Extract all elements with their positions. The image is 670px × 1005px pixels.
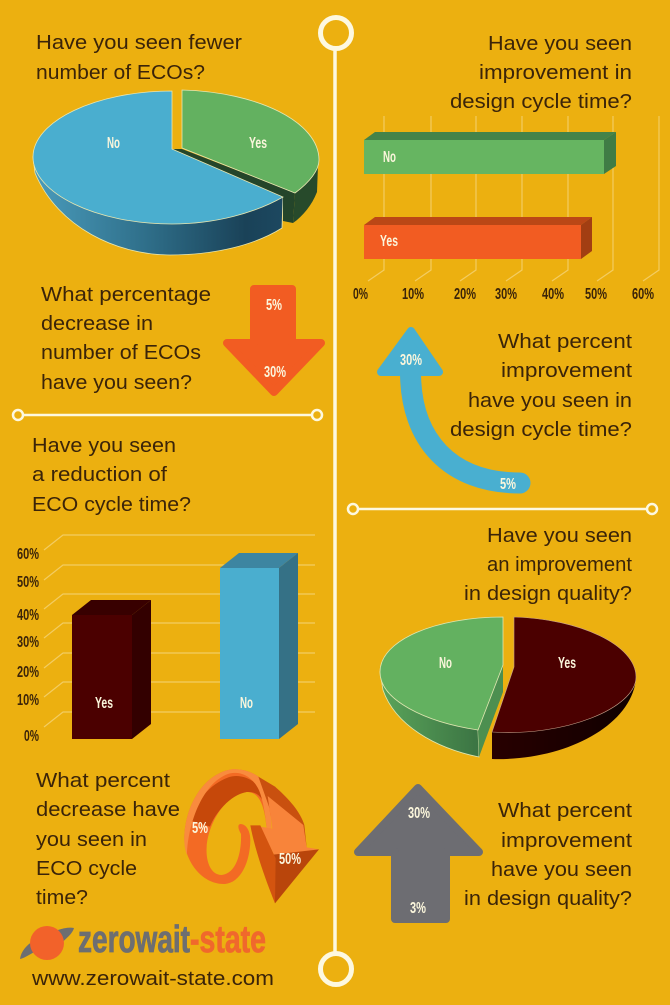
question: percent improvement in design quality xyxy=(464,800,632,910)
logo: zerowait-state xyxy=(20,919,266,961)
icon: blue curved arrow xyxy=(381,331,520,493)
pie chart: design quality: Yes xyxy=(558,655,576,672)
question: percent decrease in ECO cycle time: decrease have xyxy=(36,799,180,821)
heading: ECO cycle time: Have you seen xyxy=(32,435,176,457)
question: percent improvement in design quality: improvement xyxy=(501,830,632,852)
question: percent improvement in cycle time: have you seen in xyxy=(468,390,632,412)
heading: design cycle time: improvement in xyxy=(479,62,632,84)
bar chart: ECO cycle time: 20% xyxy=(17,664,39,681)
heading: design quality: an improvement xyxy=(487,554,632,576)
heading: ECO cycle time: a reduction of xyxy=(32,464,167,486)
question: percent improvement in design quality: What percent xyxy=(498,800,632,822)
icon: orange curly arrow xyxy=(184,769,319,903)
pie chart: fewer ECOs: Yes xyxy=(249,135,267,152)
bar chart: ECO cycle time: 0% xyxy=(24,728,39,745)
pie chart: design quality xyxy=(380,617,636,759)
question: percentage decrease: decrease in xyxy=(41,313,153,335)
bar chart: ECO cycle time: 60% xyxy=(17,546,39,563)
bar chart: ECO cycle time: 40% xyxy=(17,607,39,624)
question: percent decrease in ECO cycle time: ECO cycle xyxy=(36,858,137,880)
bar chart: design cycle time xyxy=(353,116,659,303)
bar chart: design cycle time: 0% xyxy=(353,286,368,303)
bar chart: design cycle time: No xyxy=(383,149,396,166)
bar chart: design cycle time: Yes xyxy=(380,233,398,250)
icon: grey up arrow xyxy=(358,788,479,919)
website url: www.zerowait-state.com xyxy=(31,968,274,990)
question: percent improvement in cycle time: improvement xyxy=(501,360,632,382)
pie chart: fewer ECOs xyxy=(33,90,319,255)
question: percent decrease in ECO cycle time xyxy=(36,770,180,909)
logo: zerowait-state: zerowait xyxy=(78,919,190,961)
heading: design quality: Have you seen xyxy=(487,525,632,547)
question: percent improvement in cycle time: What percent xyxy=(498,331,632,353)
icon: orange down arrow: 5% xyxy=(266,297,282,314)
icon: blue curved arrow: 5% xyxy=(500,476,516,493)
bar chart: design cycle time: 20% xyxy=(454,286,476,303)
icon: grey up arrow: 3% xyxy=(410,900,426,917)
heading: fewer ECOs xyxy=(36,32,242,84)
icon: blue curved arrow: 30% xyxy=(400,352,422,369)
question: percent decrease in ECO cycle time: you seen in xyxy=(36,829,147,851)
left divider xyxy=(13,410,322,420)
question: percentage decrease xyxy=(41,284,211,394)
logo: zerowait-state: -state xyxy=(190,919,266,961)
bar chart: design cycle time: 50% xyxy=(585,286,607,303)
bar chart: ECO cycle time: 10% xyxy=(17,692,39,709)
question: percent improvement in design quality: in design quality? xyxy=(464,888,632,910)
pie chart: fewer ECOs: No xyxy=(107,135,120,152)
question: percent decrease in ECO cycle time: What percent xyxy=(36,770,170,792)
icon: orange curly arrow: 5% xyxy=(192,820,208,837)
heading: design cycle time xyxy=(450,33,632,113)
question: percent improvement in cycle time xyxy=(450,331,632,441)
heading: fewer ECOs: Have you seen fewer xyxy=(36,32,242,54)
icon: orange down arrow: 30% xyxy=(264,364,286,381)
heading: fewer ECOs: number of ECOs? xyxy=(36,62,205,84)
bar chart: ECO cycle time xyxy=(17,535,315,745)
icon: grey up arrow: 30% xyxy=(408,805,430,822)
heading: design cycle time: design cycle time? xyxy=(450,91,632,113)
question: percent improvement in design quality: have you seen xyxy=(491,859,632,881)
heading: design quality: in design quality? xyxy=(464,583,632,605)
icon: orange down arrow xyxy=(227,289,321,392)
bar chart: design cycle time: 30% xyxy=(495,286,517,303)
question: percentage decrease: What percentage xyxy=(41,284,211,306)
question: percent improvement in cycle time: design cycle time? xyxy=(450,419,632,441)
pie chart: design quality: No xyxy=(439,655,452,672)
bar chart: design cycle time: 10% xyxy=(402,286,424,303)
bar chart: design cycle time: 40% xyxy=(542,286,564,303)
question: percentage decrease: have you seen? xyxy=(41,372,192,394)
bar chart: ECO cycle time: 30% xyxy=(17,634,39,651)
question: percent decrease in ECO cycle time: time? xyxy=(36,887,88,909)
heading: design quality xyxy=(464,525,632,605)
heading: ECO cycle time xyxy=(32,435,191,516)
bar chart: ECO cycle time: No xyxy=(240,695,253,712)
central timeline xyxy=(320,18,352,984)
question: percentage decrease: number of ECOs xyxy=(41,342,201,364)
heading: design cycle time: Have you seen xyxy=(488,33,632,55)
bar chart: ECO cycle time: Yes xyxy=(95,695,113,712)
bar chart: design cycle time: 60% xyxy=(632,286,654,303)
bar chart: ECO cycle time: 50% xyxy=(17,574,39,591)
right divider xyxy=(348,504,657,514)
heading: ECO cycle time: ECO cycle time? xyxy=(32,494,191,516)
icon: orange curly arrow: 50% xyxy=(279,851,301,868)
